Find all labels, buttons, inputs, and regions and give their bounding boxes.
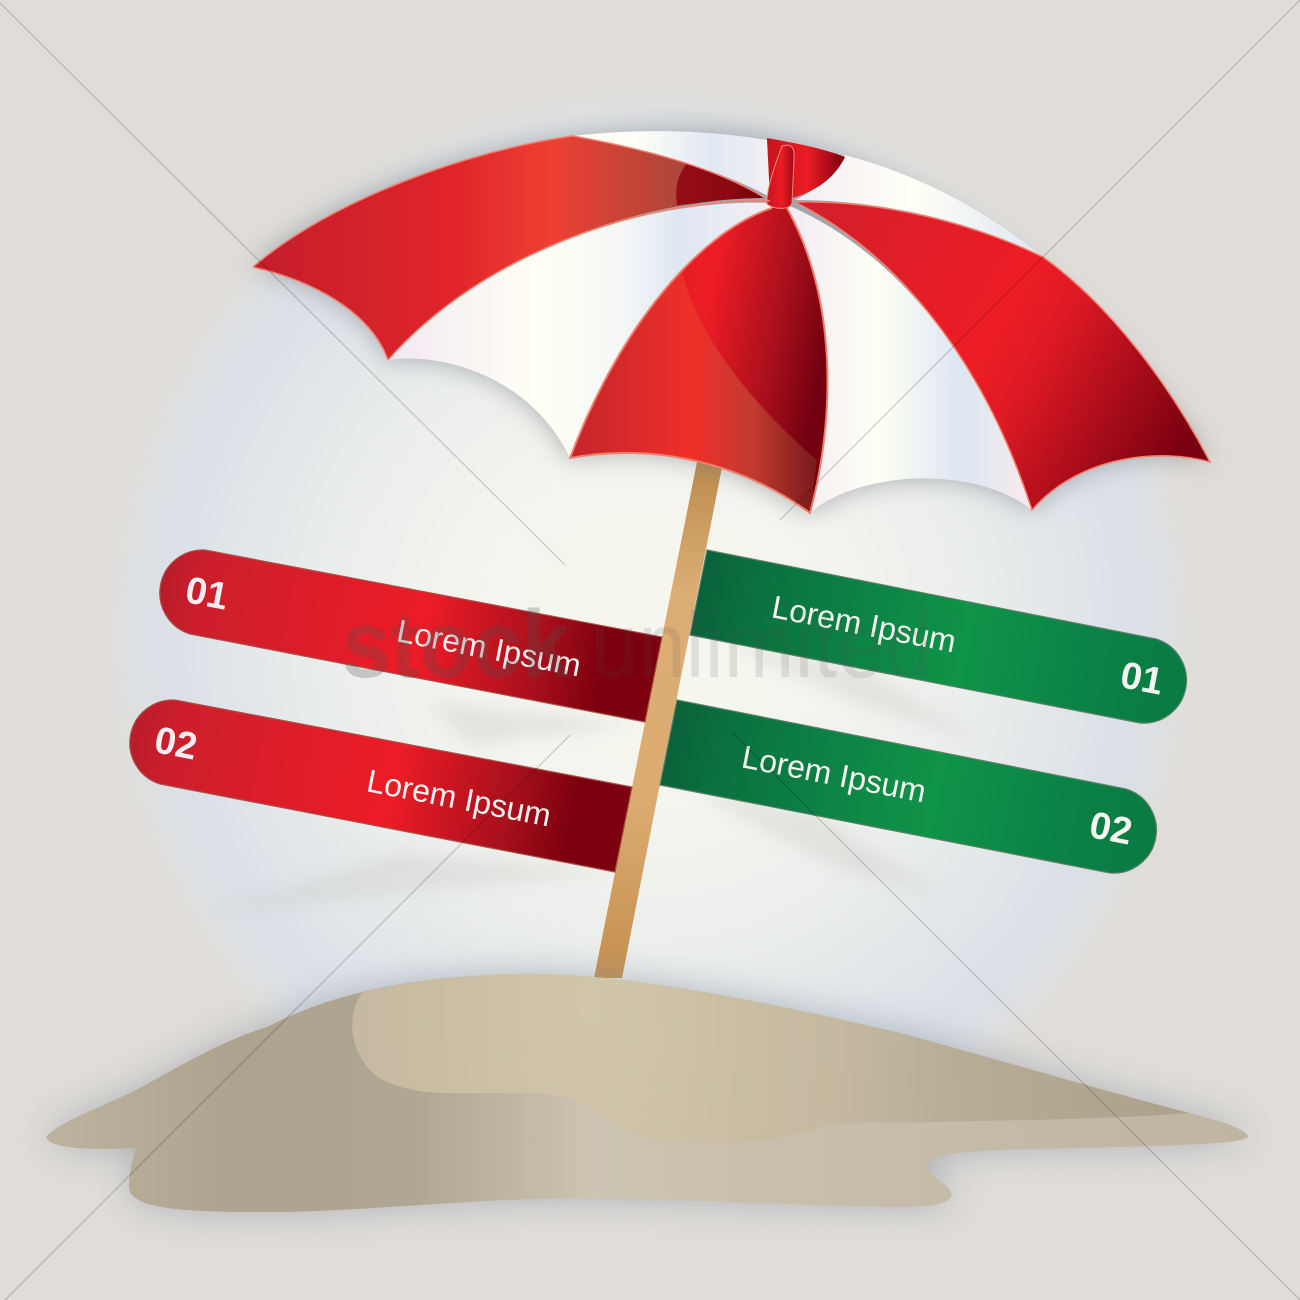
watermark: stock bbox=[342, 591, 571, 698]
sand shadow bbox=[46, 974, 1248, 1212]
light overlay bbox=[572, 272, 817, 512]
upper white panel bbox=[573, 131, 770, 197]
right red panel bbox=[795, 202, 1210, 510]
sand upper dune bbox=[352, 974, 1189, 1143]
watermark: ® bbox=[943, 611, 955, 628]
label: Lorem Ipsum bbox=[364, 763, 554, 833]
umbrella knot bbox=[767, 145, 794, 208]
dark fold bbox=[676, 164, 764, 205]
left white panel bbox=[388, 203, 772, 458]
number 01: 01 bbox=[182, 569, 232, 619]
upper left red panel bbox=[253, 136, 770, 360]
centre red panel bbox=[560, 208, 828, 520]
green banner 01 bbox=[690, 550, 1186, 723]
left red banners bbox=[130, 550, 662, 872]
green banner 02 bbox=[660, 700, 1156, 873]
number 01: 01 bbox=[1117, 654, 1167, 704]
number 02: 02 bbox=[1086, 804, 1136, 854]
pole bbox=[594, 462, 723, 978]
watermark bbox=[342, 591, 955, 698]
right green banners bbox=[660, 550, 1186, 873]
watermark: unlimited bbox=[591, 593, 932, 697]
umbrella shadow bbox=[253, 131, 1210, 513]
umbrella bbox=[253, 131, 1210, 520]
left edge highlight bbox=[253, 136, 573, 360]
red banner 01 bbox=[160, 550, 662, 722]
glowing circle backdrop bbox=[100, 85, 1200, 1185]
sand outer shape bbox=[46, 974, 1248, 1212]
label: Lorem Ipsum bbox=[769, 589, 959, 659]
number 02: 02 bbox=[151, 719, 201, 769]
panel edge bbox=[570, 208, 828, 513]
centre right white panel bbox=[787, 206, 1032, 513]
label: Lorem Ipsum bbox=[394, 613, 584, 683]
red banner 02 bbox=[130, 700, 632, 872]
top red panel bbox=[767, 138, 845, 198]
label: Lorem Ipsum bbox=[739, 739, 929, 809]
faint band shadows bbox=[200, 640, 980, 915]
sand mound bbox=[46, 974, 1248, 1212]
upper edge highlights bbox=[388, 136, 770, 360]
upper right white panel bbox=[795, 155, 1043, 257]
